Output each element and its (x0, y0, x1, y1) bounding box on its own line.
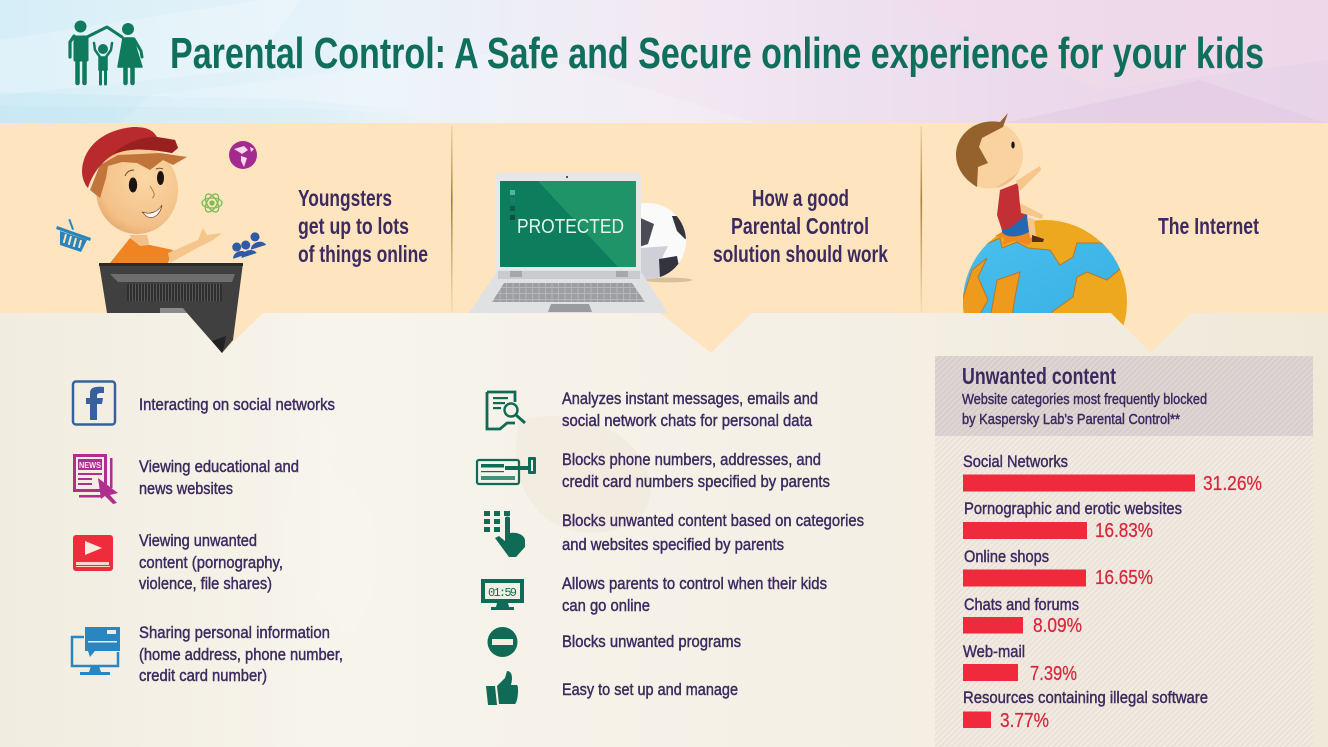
illustration: globe (963, 220, 1127, 326)
lower content background (0, 313, 1328, 747)
illustration: boy at monitor (82, 127, 243, 353)
icon: people (229, 230, 266, 259)
monitor back (99, 263, 243, 353)
child (94, 43, 112, 84)
icon: globe badge (229, 141, 257, 169)
text: analyzes: social network chats for personal data (562, 411, 812, 430)
text: educational: Viewing educational and (139, 457, 299, 476)
icon: document search (487, 392, 525, 429)
text: blocks phone: credit card numbers specified by parents (562, 472, 830, 491)
panel header: Website categories most frequently blocked (962, 391, 1207, 408)
header background (0, 0, 1328, 124)
panel: unwanted content (935, 356, 1313, 747)
father (70, 20, 87, 83)
bar: web-mail: 7.39% (1030, 663, 1077, 685)
heading: how a good solution works (713, 185, 888, 267)
bar: pornographic: 16.83% (1095, 520, 1153, 542)
bar: social networks (963, 452, 1262, 495)
bar: illegal software (963, 688, 1208, 732)
bar: social networks: 31.26% (1203, 473, 1262, 495)
heading: how a good solution works: solution should work (713, 241, 888, 267)
text: educational: news websites (139, 479, 233, 498)
illustration: boy pointing on globe (956, 113, 1044, 245)
bar: online shops (963, 547, 1153, 589)
bar: pornographic (963, 499, 1182, 542)
text: blocks categories: Blocks unwanted content based on categories (562, 511, 864, 530)
text: allows (562, 574, 827, 615)
panel: youngsters activities (72, 382, 343, 685)
text: blocks phone (562, 450, 830, 491)
illustration: laptop (469, 173, 668, 313)
text: personal info (139, 623, 343, 685)
bar: chats (963, 595, 1082, 637)
icon: atom (202, 192, 222, 214)
icon: no entry (488, 627, 518, 657)
heading: youngsters: Youngsters (298, 185, 392, 211)
bar: pornographic: Pornographic and erotic websites (964, 499, 1182, 518)
icon: news (73, 454, 118, 504)
boy eyes and mouth (125, 168, 164, 218)
panel body (935, 436, 1313, 747)
icon: video (73, 535, 113, 571)
text: unwanted: violence, file shares) (139, 574, 272, 593)
icon: timer monitor: 01:59 (488, 586, 517, 600)
icon: thumbs up (486, 671, 518, 705)
boy cap and hair (82, 127, 187, 198)
text: unwanted: Viewing unwanted (139, 531, 257, 550)
bar chart (963, 452, 1262, 732)
text: personal info: Sharing personal information (139, 623, 330, 642)
illustration: soccer ball (641, 203, 692, 282)
boy shirt and arm (110, 228, 222, 263)
tan band (0, 123, 1328, 358)
text: unwanted (139, 531, 283, 593)
text: unwanted: content (pornography, (139, 553, 283, 572)
bar: illegal software: 3.77% (1000, 710, 1049, 732)
bar: illegal software: Resources containing illegal software (963, 688, 1208, 707)
bar: online shops: 16.65% (1095, 567, 1153, 589)
icon: news: NEWS (79, 461, 102, 470)
icon: timer monitor (481, 579, 524, 610)
icon: family under roof (70, 20, 142, 84)
text: easy: Easy to set up and manage (562, 680, 738, 699)
boy head (96, 146, 178, 234)
bar: online shops: Online shops (964, 547, 1049, 566)
text: analyzes (562, 389, 818, 430)
panel header: Unwanted content (962, 363, 1116, 389)
mother (118, 23, 142, 83)
heading: the internet: The Internet (1158, 213, 1259, 239)
icon: card on monitor (72, 627, 120, 675)
heading: how a good solution works: How a good (752, 185, 849, 211)
icon: facebook (73, 382, 115, 424)
text: blocks programs: Blocks unwanted programs (562, 632, 741, 651)
icon: card blocked (477, 457, 536, 484)
roof arms (87, 27, 122, 37)
text: allows: can go online (562, 596, 650, 615)
text: educational (139, 457, 299, 498)
bar: chats: Chats and forums (964, 595, 1079, 614)
background texture (280, 416, 651, 640)
panel: how the solution works (477, 389, 864, 705)
text: blocks phone: Blocks phone numbers, addresses, and (562, 450, 821, 469)
heading: youngsters (298, 185, 428, 267)
bar: web-mail: Web-mail (963, 642, 1025, 661)
panel header: by Kaspersky Lab's Parental Control** (962, 411, 1180, 428)
text: personal info: credit card number) (139, 666, 267, 685)
panel header (935, 356, 1313, 436)
icon: shopping basket (56, 219, 91, 252)
bar: chats: 8.09% (1033, 615, 1082, 637)
text: personal info: (home address, phone number, (139, 645, 343, 664)
bar: web-mail (963, 642, 1077, 685)
text: analyzes: Analyzes instant messages, emails and (562, 389, 818, 408)
text: blocks categories: and websites specified by parents (562, 535, 784, 554)
text: allows: Allows parents to control when their kids (562, 574, 827, 593)
heading: how a good solution works: Parental Control (731, 213, 869, 239)
column dividers (451, 126, 922, 312)
laptop screen text: PROTECTED (517, 216, 624, 238)
heading: youngsters: get up to lots (298, 213, 409, 239)
text: social networks: Interacting on social networks (139, 395, 335, 414)
text: blocks categories (562, 511, 864, 554)
heading: youngsters: of things online (298, 241, 428, 267)
bar: social networks: Social Networks (963, 452, 1068, 471)
icon: hand on keypad (484, 511, 525, 557)
